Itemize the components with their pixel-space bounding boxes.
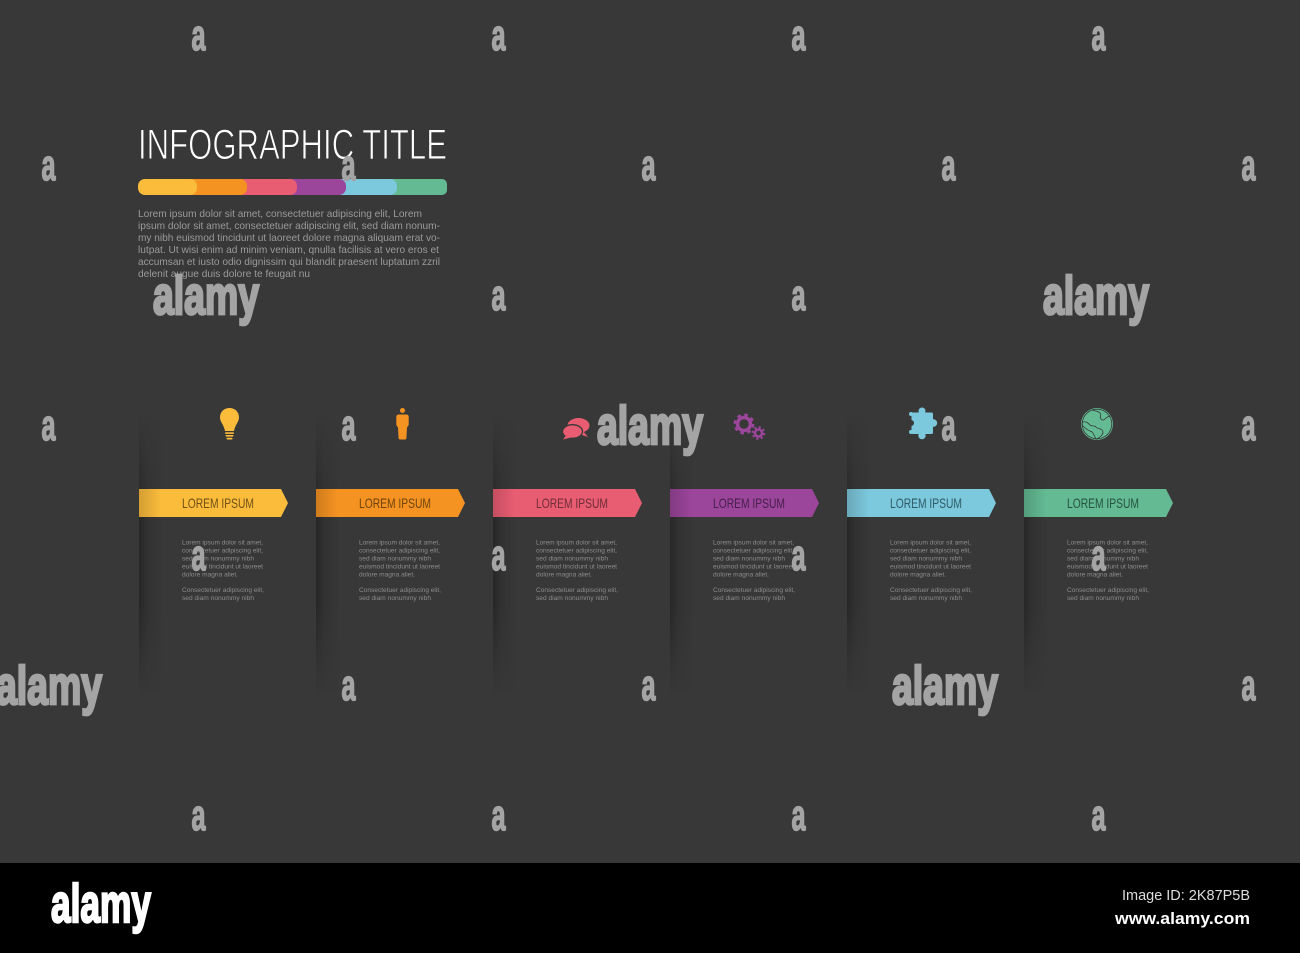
watermarks: a	[792, 791, 806, 840]
text 6: sed diam nonummy nibh	[1067, 595, 1140, 602]
label 6: LOREM IPSUM	[1067, 495, 1139, 511]
label 1: LOREM IPSUM	[182, 495, 254, 511]
text 6: sed diam nonummy nibh	[1067, 556, 1140, 562]
text 3: consectetuer adipiscing elit,	[536, 548, 617, 554]
icon: globe	[1081, 408, 1113, 440]
text 4: dolore magna aliet.	[713, 572, 769, 578]
text 6: Lorem ipsum dolor sit amet,	[1067, 540, 1148, 546]
text 4: sed diam nonummy nibh	[713, 595, 786, 602]
footer band	[0, 863, 1300, 953]
arrow 6	[1024, 489, 1173, 517]
text 1: consectetuer adipiscing elit,	[182, 548, 263, 554]
text 6	[1067, 540, 1149, 602]
text 6: Consectetuer adipiscing elit,	[1067, 587, 1149, 594]
intro paragraph: Lorem ipsum dolor sit amet, consectetuer adipiscing elit, Lorem	[138, 208, 422, 220]
text 2: sed diam nonummy nibh	[359, 556, 432, 562]
text 1: dolore magna aliet.	[182, 572, 238, 578]
text 3: sed diam nonummy nibh	[536, 556, 609, 562]
watermarks: a	[492, 531, 506, 580]
text 3: Consectetuer adipiscing elit,	[536, 587, 618, 594]
step 2	[316, 489, 465, 602]
step 1	[139, 489, 288, 602]
text 6: consectetuer adipiscing elit,	[1067, 548, 1148, 554]
watermarks: a	[492, 791, 506, 840]
icon: puzzle piece	[908, 408, 937, 439]
text 3	[536, 540, 618, 602]
step 4	[670, 489, 819, 602]
watermarks: a	[1092, 531, 1106, 580]
watermarks: a	[342, 661, 356, 710]
intro paragraph: accumsan et iusto odio dignissim qui blandit praesent luptatum zzril	[138, 256, 440, 268]
label 2: LOREM IPSUM	[359, 495, 431, 511]
text 2	[359, 540, 441, 602]
colour bar	[138, 179, 447, 195]
watermarks: alamy	[892, 656, 998, 716]
label 4: LOREM IPSUM	[713, 495, 785, 511]
text 2: Lorem ipsum dolor sit amet,	[359, 540, 440, 546]
step 3	[493, 489, 642, 602]
text 3: dolore magna aliet.	[536, 572, 592, 578]
intro paragraph: my nibh euismod tincidunt ut laoreet dolore magna aliquam erat vo-	[138, 232, 440, 244]
step 6	[1024, 489, 1173, 602]
watermarks: a	[942, 141, 956, 190]
watermarks: a	[792, 11, 806, 60]
watermarks: a	[342, 141, 356, 190]
watermarks: a	[342, 401, 356, 450]
text 3: euismod tincidunt ut laoreet	[536, 564, 617, 570]
intro paragraph	[138, 208, 440, 280]
watermarks: a	[792, 531, 806, 580]
image id: Image ID: 2K87P5B	[1122, 887, 1250, 904]
watermarks: a	[42, 141, 56, 190]
title: INFOGRAPHIC TITLE	[138, 121, 447, 169]
text 5: euismod tincidunt ut laoreet	[890, 564, 971, 570]
arrow 2	[316, 489, 465, 517]
text 4: Consectetuer adipiscing elit,	[713, 587, 795, 594]
text 1: Consectetuer adipiscing elit,	[182, 587, 264, 594]
text 2: euismod tincidunt ut laoreet	[359, 564, 440, 570]
text 2: consectetuer adipiscing elit,	[359, 548, 440, 554]
text 2: dolore magna aliet.	[359, 572, 415, 578]
arrow 5	[847, 489, 996, 517]
watermarks: a	[1242, 141, 1256, 190]
watermarks: a	[1242, 401, 1256, 450]
text 2: Consectetuer adipiscing elit,	[359, 587, 441, 594]
watermarks: a	[792, 271, 806, 320]
watermarks: a	[942, 401, 956, 450]
watermarks: a	[492, 11, 506, 60]
watermarks: alamy	[0, 656, 102, 716]
text 6: dolore magna aliet.	[1067, 572, 1123, 578]
column shadows	[139, 463, 1031, 651]
text 4: euismod tincidunt ut laoreet	[713, 564, 794, 570]
watermarks: a	[192, 11, 206, 60]
watermarks: alamy	[1043, 266, 1149, 326]
text 3: Lorem ipsum dolor sit amet,	[536, 540, 617, 546]
intro paragraph: ipsum dolor sit amet, consectetuer adipiscing elit, sed diam nonum-	[138, 220, 440, 232]
text 4	[713, 540, 795, 602]
text 4: consectetuer adipiscing elit,	[713, 548, 794, 554]
text 1	[182, 540, 264, 602]
watermarks: a	[642, 661, 656, 710]
text 5: sed diam nonummy nibh	[890, 556, 963, 562]
text 4: sed diam nonummy nibh	[713, 556, 786, 562]
watermarks: a	[192, 531, 206, 580]
watermarks: alamy	[597, 396, 703, 456]
text 2: sed diam nonummy nibh	[359, 595, 432, 602]
text 1: euismod tincidunt ut laoreet	[182, 564, 263, 570]
website: www.alamy.com	[1114, 909, 1250, 928]
step 5	[847, 489, 996, 602]
text 1: Lorem ipsum dolor sit amet,	[182, 540, 263, 546]
arrow 4	[670, 489, 819, 517]
text 1: sed diam nonummy nibh	[182, 595, 255, 602]
watermarks: a	[1092, 791, 1106, 840]
icon: light bulb	[220, 408, 239, 440]
watermarks: a	[642, 141, 656, 190]
arrow 1	[139, 489, 288, 517]
intro paragraph: lutpat. Ut wisi enim ad minim veniam, qnulla facilisis at vero eros et	[138, 244, 439, 256]
text 5	[890, 540, 972, 602]
label 5: LOREM IPSUM	[890, 495, 962, 511]
footer logo: alamy	[51, 874, 151, 934]
text 5: consectetuer adipiscing elit,	[890, 548, 971, 554]
text 5: Lorem ipsum dolor sit amet,	[890, 540, 971, 546]
watermarks: a	[192, 791, 206, 840]
text 4: Lorem ipsum dolor sit amet,	[713, 540, 794, 546]
watermarks: a	[1242, 661, 1256, 710]
intro paragraph: delenit augue duis dolore te feugait nu	[138, 268, 310, 280]
text 3: sed diam nonummy nibh	[536, 595, 609, 602]
watermarks: a	[492, 271, 506, 320]
arrow 3	[493, 489, 642, 517]
icon: person	[396, 408, 409, 440]
icon: speech bubbles	[562, 418, 590, 440]
watermarks: alamy	[153, 266, 259, 326]
text 6: euismod tincidunt ut laoreet	[1067, 564, 1148, 570]
text 5: dolore magna aliet.	[890, 572, 946, 578]
icon: gears	[735, 415, 764, 439]
text 5: Consectetuer adipiscing elit,	[890, 587, 972, 594]
watermarks: a	[42, 401, 56, 450]
watermarks: a	[1092, 11, 1106, 60]
text 1: sed diam nonummy nibh	[182, 556, 255, 562]
label 3: LOREM IPSUM	[536, 495, 608, 511]
text 5: sed diam nonummy nibh	[890, 595, 963, 602]
